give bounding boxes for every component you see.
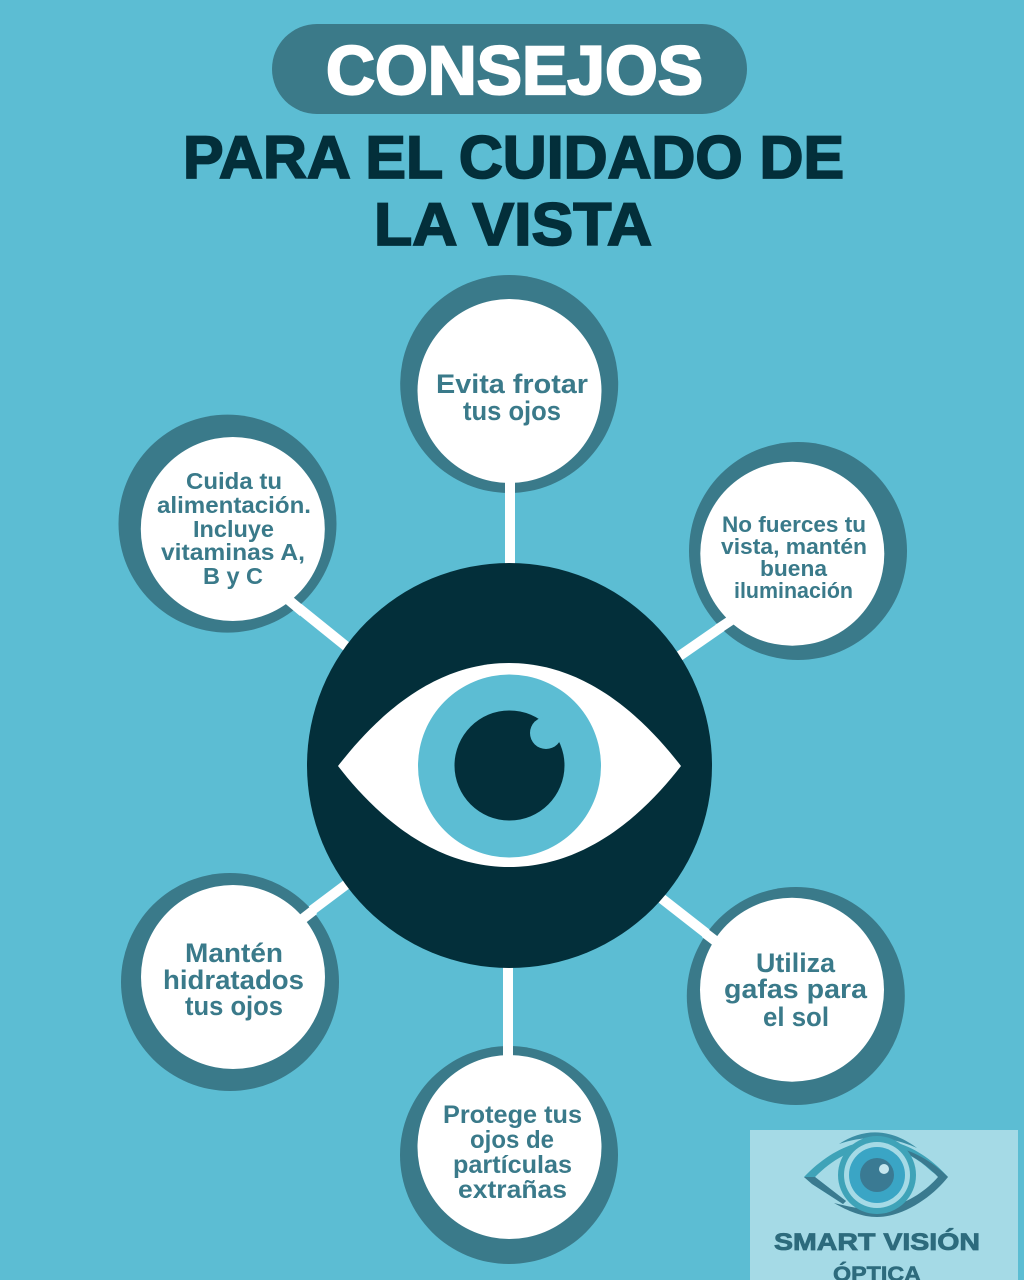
panel: protege tus ojos: extrañas [458, 1176, 567, 1204]
heading: para el cuidado de la vista: LA VISTA [374, 191, 652, 258]
panel: mantén hidratados tus ojos: hidratados [163, 965, 304, 995]
panel: mantén hidratados tus ojos [121, 873, 339, 1091]
heading: para el cuidado de la vista [183, 124, 844, 258]
panel: utiliza gafas para el sol [687, 887, 905, 1105]
panel: protege tus ojos [400, 1040, 618, 1264]
panel: no fuerces tu vista [689, 442, 907, 660]
heading: para el cuidado de la vista: PARA EL CUIDADO DE [183, 124, 844, 191]
panel: cuida tu alimentación: Cuida tu [186, 468, 282, 494]
icon: central eye [307, 563, 712, 968]
panel: no fuerces tu vista: No fuerces tu [722, 512, 866, 537]
panel: evita frotar tus ojos: tus ojos [463, 396, 561, 426]
panel: utiliza gafas para el sol: el sol [763, 1002, 829, 1032]
panel: cuida tu alimentación: B y C [203, 563, 263, 589]
panel: cuida tu alimentación: vitaminas A, [161, 539, 305, 565]
panel: cuida tu alimentación: Incluye [193, 516, 274, 542]
panel: utiliza gafas para el sol: gafas para [724, 974, 868, 1004]
panel: cuida tu alimentación [118, 415, 336, 633]
panel: no fuerces tu vista: buena [760, 556, 828, 581]
panel: evita frotar tus ojos [400, 275, 618, 493]
logo panel: smart visión óptica: SMART VISIÓN [774, 1228, 980, 1256]
panel: protege tus ojos: Protege tus [443, 1101, 582, 1129]
panel: no fuerces tu vista: iluminación [734, 578, 853, 603]
panel: utiliza gafas para el sol: Utiliza [756, 948, 836, 978]
panel: no fuerces tu vista: vista, mantén [721, 534, 867, 559]
panel: cuida tu alimentación: alimentación. [157, 492, 311, 518]
connector lines [290, 480, 730, 1058]
title pill: CONSEJOS: CONSEJOS [326, 32, 703, 109]
panel: mantén hidratados tus ojos: tus ojos [185, 991, 283, 1021]
panel: mantén hidratados tus ojos: Mantén [185, 938, 283, 968]
icon: logo eye [804, 1132, 948, 1217]
panel: evita frotar tus ojos: Evita frotar [436, 369, 589, 399]
title pill: CONSEJOS [272, 24, 747, 114]
panel: protege tus ojos: partículas [453, 1151, 572, 1179]
panel: protege tus ojos: ojos de [470, 1126, 554, 1154]
logo panel: smart visión óptica [750, 1130, 1018, 1280]
